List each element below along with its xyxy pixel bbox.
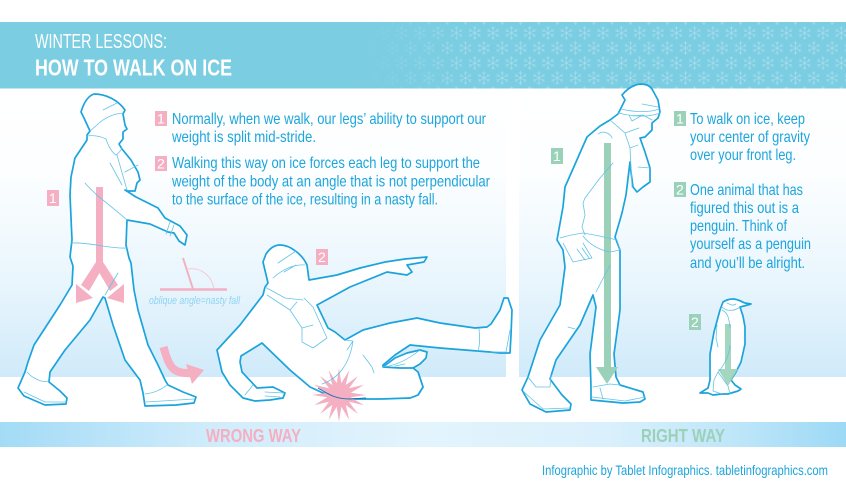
- arrow: curved fall arrow: [164, 347, 204, 384]
- note 1 right way: 1: [676, 110, 684, 126]
- pink badge: figure 2: [316, 249, 328, 265]
- pink badge: figure 1: 1: [49, 190, 57, 206]
- ice floor: [0, 377, 846, 423]
- label: wrong way: WRONG WAY: [206, 425, 302, 446]
- note 2 right way: and you’ll be alright.: [690, 255, 805, 272]
- figure: walking man wrong way: [18, 94, 196, 406]
- green badge: penguin: [689, 314, 701, 330]
- note 2 wrong way: weight of the body at an angle that is not perpendicular: [171, 174, 491, 190]
- note 1 right way: To walk on ice, keep: [690, 111, 805, 128]
- green badge: figure 1: [551, 148, 563, 164]
- note 2 right way: [674, 182, 811, 272]
- note 1 wrong way: 1: [157, 110, 165, 126]
- note 2 right way: penguin. Think of: [690, 218, 787, 235]
- note 2 right way: yourself as a penguin: [690, 236, 811, 253]
- note 1 right way: your center of gravity: [690, 129, 810, 146]
- header banner: [0, 22, 846, 88]
- arrow: split weight: [76, 187, 124, 303]
- note 2 right way: figured this out is a: [690, 200, 799, 217]
- label: right way: RIGHT WAY: [641, 425, 726, 446]
- title: winter lessons: WINTER LESSONS:: [35, 30, 167, 53]
- figure: penguin: [700, 299, 751, 395]
- divider gap between wrong and right way: [506, 88, 519, 377]
- pink badge: figure 1: [47, 190, 59, 206]
- note 1 right way: [674, 110, 810, 164]
- note 2 wrong way: 2: [157, 156, 165, 172]
- bottom label band: [0, 422, 846, 447]
- note 2 right way: 2: [676, 182, 684, 198]
- note 2 right way: One animal that has: [690, 182, 803, 199]
- oblique angle diagram: [149, 258, 240, 307]
- note 1 wrong way: Normally, when we walk, our legs’ ability to support our: [172, 111, 487, 128]
- oblique angle diagram: oblique angle=nasty fall: [149, 295, 240, 307]
- note 2 wrong way: to the surface of the ice, resulting in a nasty fall.: [172, 192, 438, 208]
- starburst: impact: [312, 368, 366, 422]
- figure: fallen man: [217, 245, 512, 422]
- note 1 wrong way: [155, 110, 487, 146]
- figure: leaning man right way: [522, 84, 660, 412]
- arrow: centre of gravity: [596, 143, 618, 384]
- title: how to walk on ice: HOW TO WALK ON ICE: [35, 54, 232, 80]
- note 1 right way: over your front leg.: [690, 147, 796, 164]
- arrow: penguin gravity: [718, 324, 738, 386]
- note 2 wrong way: Walking this way on ice forces each leg to support the: [172, 155, 480, 172]
- dark contour line: [318, 388, 366, 399]
- pink badge: figure 2: 2: [318, 249, 326, 265]
- panel: sky background: [0, 88, 846, 378]
- green badge: penguin: 2: [691, 314, 699, 330]
- note 1 wrong way: weight is split mid-stride.: [171, 129, 316, 146]
- green badge: figure 1: 1: [553, 148, 561, 164]
- note 2 wrong way: [155, 155, 491, 208]
